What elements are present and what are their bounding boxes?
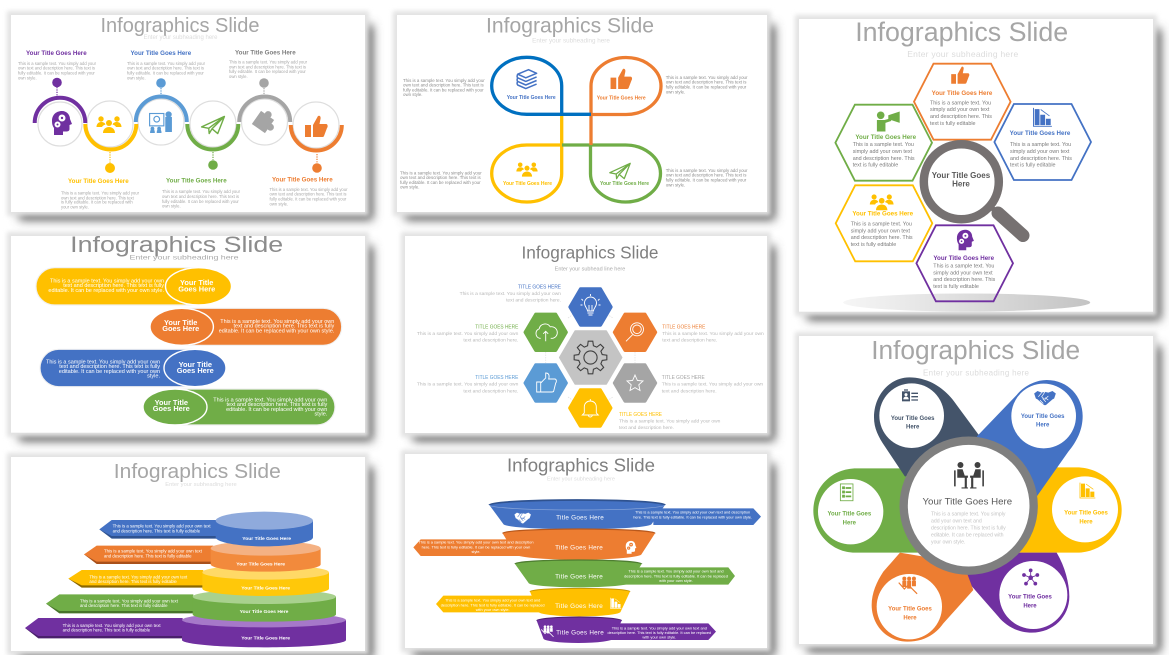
loops diagram <box>492 57 661 202</box>
step descriptions: own text and description here. This text is <box>270 192 346 196</box>
funnel descriptions: with your own style. <box>659 578 693 583</box>
pill: yellow row <box>36 268 232 305</box>
magnifier title: Here <box>952 180 970 188</box>
arrow: purple <box>607 623 716 640</box>
pill descriptions: editable. It can be replaced with your own style. <box>48 288 164 294</box>
subheading: clover slide: Enter your subheading here <box>532 38 610 44</box>
hexagon labels left: text and description here. <box>506 298 561 304</box>
funnel descriptions: with your own style. <box>476 607 510 612</box>
petal titles: Here <box>1079 519 1093 525</box>
arrow descriptions: This is a sample text. You simply add your own text <box>89 574 188 579</box>
arrow descriptions: This is a sample text. You simply add your own text <box>104 549 203 554</box>
funnel diagram <box>413 500 761 643</box>
hexagon descriptions: and description here. This <box>930 114 992 120</box>
pill descriptions: editable. It can be replaced with your own <box>226 407 327 413</box>
petal titles <box>827 414 1108 621</box>
pill descriptions: text and description here. This text is fully <box>63 283 164 289</box>
loop descriptions: own text and description here. This text is <box>666 80 747 85</box>
center ring <box>904 441 1034 571</box>
heading: gear slide: Infographics Slide <box>522 242 658 262</box>
hexagon labels right: text and description here. <box>619 425 674 431</box>
arrow: green <box>623 567 735 585</box>
funnel descriptions: This is a sample text. You simply add your own text and description <box>635 510 750 515</box>
pill descriptions: style. <box>314 411 328 417</box>
hexagon descriptions: simply add your own text <box>1010 149 1070 155</box>
step descriptions: own text and description here. This text is <box>18 66 95 71</box>
funnel descriptions: This is a sample text. You simply add your own text and description <box>418 540 534 545</box>
hexagon titles: Your Title Goes Here <box>852 210 914 218</box>
hexagon labels left: TITLE GOES HERE <box>475 375 519 381</box>
arrow descriptions: and description here. This text is fully editable <box>80 603 168 608</box>
step descriptions: fully editable. It can be replaced with your <box>270 196 347 202</box>
step descriptions: own style. <box>162 204 181 208</box>
hexagon labels left: This is a sample text. You simply add your own <box>460 291 561 297</box>
tier titles: Your Title Goes Here <box>236 562 285 568</box>
hexagon titles: Your Title Goes Here <box>855 134 917 141</box>
panel: magnifier hexagons slide <box>795 15 1161 320</box>
tier: purple <box>537 617 622 643</box>
arrow descriptions: This is a sample text. You simply add your own text <box>80 598 179 603</box>
hexagon descriptions: This is a sample text. You <box>853 142 914 148</box>
loop descriptions: This is a sample text. You simply add your <box>400 170 482 176</box>
cylinder: orange tier <box>211 541 321 572</box>
funnel descriptions: This is a sample text. You simply add your own text and <box>628 569 724 574</box>
loop descriptions: fully editable. It can be replaced with your <box>666 178 747 182</box>
hexagon labels right: This is a sample text. You simply add your own <box>662 331 764 337</box>
hexagon labels right: TITLE GOES HERE <box>662 324 706 330</box>
arrow: orange <box>84 546 213 564</box>
loop titles: Your Title Goes Here <box>600 181 649 187</box>
funnel titles: Title Goes Here <box>555 603 603 610</box>
loop titles: Your Title Goes Here <box>597 96 646 102</box>
icon: thumbs up <box>611 69 632 89</box>
magnifying glass <box>924 144 1023 236</box>
loop descriptions: own style. <box>666 182 685 188</box>
panel: clover loops slide <box>393 11 775 220</box>
icon: puzzle <box>252 107 280 136</box>
step descriptions: your own style. <box>61 205 89 210</box>
heading: cylinders slide: Infographics Slide <box>114 461 281 483</box>
petal titles: Here <box>906 425 920 431</box>
loop descriptions <box>400 75 748 190</box>
step descriptions: own style. <box>270 202 288 206</box>
icon: bars <box>611 598 621 608</box>
arrow descriptions: This is a sample text. You simply add your own text <box>113 524 211 529</box>
petal titles: Your Title Goes <box>891 416 935 422</box>
cylinder stack diagram <box>25 512 346 647</box>
subheading: cylinders slide: Enter your subheading here <box>165 482 237 488</box>
funnel titles: Title Goes Here <box>556 514 604 521</box>
pill titles: Your Title <box>179 360 212 369</box>
loop titles: Your Title Goes Here <box>503 181 552 187</box>
hexagon titles: Your Title Goes Here <box>933 255 995 262</box>
connector dots <box>52 78 322 173</box>
heading: funnel slide: Infographics Slide <box>507 454 655 476</box>
panel: petals slide <box>795 332 1161 652</box>
funnel descriptions: description here. This text is fully editable. It can be replaced <box>441 602 545 607</box>
hexagon descriptions: simply add your own text <box>853 149 913 155</box>
step descriptions: own style. <box>229 74 248 79</box>
tier titles: Your Title Goes Here <box>242 536 291 542</box>
hexagon descriptions: simply add your own text <box>930 107 990 113</box>
step titles: Your Title Goes Here <box>166 178 227 184</box>
hexagon descriptions: text is fully editable <box>933 284 979 290</box>
icon: paper plane <box>202 116 224 134</box>
step descriptions: This is a sample text. You simply add your <box>229 60 308 64</box>
petal titles: Your Title Goes <box>888 607 932 613</box>
hexagon: light blue thumb <box>525 365 566 401</box>
funnel descriptions: This is a sample text. You simply add your own text and <box>445 598 540 603</box>
icon: bar chart <box>1034 108 1052 126</box>
connector lines <box>546 313 635 402</box>
pill: blue row <box>40 349 226 387</box>
arrow: green <box>46 594 193 613</box>
hexagon descriptions: This is a sample text. You <box>933 264 994 270</box>
funnel descriptions: description here. This text is fully editable. It can be replaced <box>607 630 711 635</box>
icon: thumbs up <box>951 67 969 84</box>
center description: This is a sample text. You simply <box>931 511 1006 517</box>
loop titles: Your Title Goes Here <box>507 95 556 101</box>
magnifier title: Your Title Goes <box>932 171 991 180</box>
center description: description here. This text is fully <box>931 525 1006 531</box>
hexagon labels left: This is a sample text. You simply add your own <box>417 382 519 388</box>
arrow descriptions: and description here. This text is fully editable <box>89 579 177 584</box>
tier titles <box>236 536 291 641</box>
hexagon descriptions <box>851 100 1072 290</box>
funnel titles <box>555 514 604 637</box>
hexagon labels left <box>417 284 562 394</box>
hexagon titles <box>852 90 1071 262</box>
funnel descriptions: This is a sample text. You simply add your own text and <box>612 625 707 630</box>
icon: paper plane <box>610 163 630 179</box>
hexagon descriptions: and description here. This <box>851 235 913 241</box>
hexagon descriptions: simply add your own text <box>933 270 993 276</box>
petal titles: Your Title Goes <box>1021 414 1065 420</box>
loop descriptions: own text and description here. This text is <box>666 173 747 178</box>
petal titles: Here <box>1036 423 1050 429</box>
arrow: yellow <box>436 596 547 612</box>
loop descriptions: own text and description here. This text is <box>400 175 482 180</box>
hexagon titles: Your Title Goes Here <box>1010 130 1071 137</box>
funnel titles: Title Goes Here <box>555 574 603 581</box>
tier: orange <box>503 529 655 560</box>
hexagon: orange magnifier <box>614 314 656 350</box>
hexagon descriptions: This is a sample text. You <box>930 100 991 106</box>
petal titles: Here <box>1023 603 1037 609</box>
petal titles: Your Title Goes <box>827 512 872 518</box>
loop descriptions: fully editable. It can be replaced with your <box>403 87 484 92</box>
pill descriptions: text and description here. This text is fully <box>234 324 335 330</box>
hexagon descriptions: text is fully editable <box>1010 163 1056 169</box>
icon: head with gears <box>52 111 72 135</box>
funnel descriptions: description here. This text is fully editable. It can be replaced <box>624 573 728 578</box>
icon: people <box>516 162 538 177</box>
tier: blue <box>489 500 665 529</box>
step descriptions: This is a sample text. You simply add your <box>61 191 140 196</box>
loop descriptions: own style. <box>403 92 423 97</box>
funnel descriptions: with your own style. <box>642 635 676 640</box>
step descriptions: own text and description here. This text <box>61 195 135 200</box>
icon: team chart <box>541 626 554 637</box>
icon: books <box>517 70 537 89</box>
loop descriptions: own style. <box>666 89 685 94</box>
hexagon: green cloud <box>525 314 566 350</box>
hexagon: blue bulb <box>570 289 611 325</box>
icon: people <box>870 194 894 210</box>
center description: your own style. <box>931 539 965 545</box>
pill titles: Your Title <box>155 398 188 407</box>
petal titles: Here <box>843 520 857 526</box>
icon: network <box>1022 569 1039 585</box>
loop descriptions: fully editable. It can be replaced with your <box>400 180 481 185</box>
center description: add your own text and <box>931 518 982 524</box>
center title: Your Title Goes Here <box>922 496 1012 506</box>
arrow descriptions: This is a sample text. You simply add your own text <box>63 623 161 628</box>
arrow: blue <box>99 520 217 539</box>
pill titles: Your Title <box>164 318 197 327</box>
step descriptions: This is a sample text. You simply add your <box>127 61 206 66</box>
hexagon descriptions: text is fully editable <box>930 121 976 127</box>
petal: blue <box>977 380 1083 497</box>
arrow: orange <box>413 539 533 556</box>
step titles: Your Title Goes Here <box>68 178 129 185</box>
loop titles <box>503 95 649 187</box>
icon: people <box>96 116 122 133</box>
pill titles: Your Title <box>180 278 213 287</box>
pill descriptions: This is a sample text. You simply add your own <box>213 398 327 404</box>
hexagon labels right: This is a sample text. You simply add your own <box>619 418 721 424</box>
step descriptions: fully editable. It can be replaced with your <box>162 199 239 204</box>
pill titles <box>153 278 215 413</box>
hexagon labels right: text and description here. <box>662 388 717 394</box>
petal titles: Your Title Goes <box>1064 511 1108 517</box>
hexagon descriptions: and description here. This <box>1010 156 1072 162</box>
pill descriptions: editable. It can be replaced with your own style. <box>219 328 335 334</box>
icon: bars yellow <box>1080 483 1095 498</box>
hexagon: grey star <box>614 365 656 401</box>
pill titles: Goes Here <box>162 324 199 333</box>
funnel titles: Title Goes Here <box>556 630 604 637</box>
center hexagon <box>560 331 622 384</box>
step descriptions: is fully editable. It can be replaced with <box>61 200 133 205</box>
hexagon descriptions: text is fully editable <box>851 242 896 248</box>
arrow: blue <box>653 508 761 525</box>
petal: yellow <box>1017 467 1122 553</box>
step titles <box>26 50 333 185</box>
panel: stacked cylinders slide <box>7 453 373 655</box>
heading: clover slide: Infographics Slide <box>486 14 654 38</box>
subheading: magnifier slide: Enter your subheading here <box>907 49 1018 59</box>
panel: pill rows slide <box>7 232 373 441</box>
petal: green <box>813 468 923 553</box>
hexagon descriptions: simply add your own text <box>851 228 911 234</box>
loop descriptions: fully editable. It can be replaced with your <box>666 84 747 90</box>
funnel titles: Title Goes Here <box>555 545 603 552</box>
step titles: Your Title Goes Here <box>272 176 333 184</box>
funnel descriptions: here. This text is fully editable. It can be replaced with your own style. <box>633 514 752 519</box>
arrow descriptions: and description here. This text is fully editable <box>63 628 151 633</box>
step titles: Your Title Goes Here <box>26 50 87 57</box>
pill descriptions: style. <box>147 374 160 380</box>
hexagon labels right: This is a sample text. You simply add your own <box>662 382 763 388</box>
loop descriptions: This is a sample text. You simply add your <box>666 168 748 173</box>
loop descriptions: own text and description here. This text is <box>403 83 485 88</box>
tier titles: Your Title Goes Here <box>240 609 289 615</box>
subheading: pill slide: Enter your subheading here <box>130 254 239 262</box>
petal: purple <box>963 553 1069 633</box>
petal: navy <box>874 377 980 477</box>
hexagon labels left: TITLE GOES HERE <box>518 284 562 290</box>
panel: funnel slide <box>401 450 775 655</box>
petal titles: Here <box>903 615 917 621</box>
hexagon labels left: TITLE GOES HERE <box>475 324 519 330</box>
loop descriptions: This is a sample text. You simply add your <box>403 78 485 83</box>
petal: orange <box>872 553 973 642</box>
step descriptions: own text and description here. This text is <box>229 64 306 69</box>
step descriptions: This is a sample text. You simply add your <box>162 189 241 194</box>
pill descriptions: text and description here. This text is fully <box>59 364 160 370</box>
loop descriptions: This is a sample text. You simply add your <box>666 75 748 80</box>
icon: gear <box>574 341 607 374</box>
pill descriptions: This is a sample text. You simply add your own <box>50 278 164 284</box>
pill descriptions: This is a sample text. You simply add your own <box>220 319 334 325</box>
tier: green <box>515 560 642 587</box>
panel: gear hexagons slide <box>401 232 775 441</box>
subheading: gear slide: Enter your subhead line here <box>555 266 625 272</box>
arrow: purple <box>25 618 183 638</box>
hexagon descriptions: and description here. This <box>933 277 996 283</box>
pill: orange row <box>150 308 342 345</box>
subheading: timeline slide: Enter your subheading here <box>143 35 218 41</box>
arrow: yellow <box>68 570 203 588</box>
hexagon descriptions: This is a sample text. You <box>1010 142 1071 148</box>
step descriptions: own text and description here. This text is <box>127 66 204 71</box>
hexagon descriptions: and description here. This <box>853 156 915 162</box>
subheading: petals slide: Enter your subheading here <box>923 368 1030 378</box>
step descriptions: own text and description here. This text is <box>162 194 239 199</box>
icon: megaphone person <box>877 112 900 131</box>
cylinder: green tier <box>193 589 336 622</box>
petal titles: Your Title Goes <box>1008 595 1052 601</box>
hexagon descriptions: text is fully editable <box>853 163 898 169</box>
arrow descriptions <box>63 524 211 633</box>
tier titles: Your Title Goes Here <box>241 586 290 592</box>
petal diagram <box>813 377 1122 642</box>
step descriptions: This is a sample text. You simply add your <box>270 187 348 192</box>
step descriptions: fully editable. It can be replaced with your <box>18 70 95 75</box>
center description: editable. It can be replaced with <box>931 533 1004 539</box>
heading: magnifier slide: Infographics Slide <box>855 17 1068 47</box>
icon: team chart <box>899 577 917 594</box>
icon: presenter <box>150 112 171 132</box>
hexagon descriptions: This is a sample text. You <box>851 222 912 228</box>
step descriptions: own style. <box>127 76 146 81</box>
arrow descriptions: and description here. This text is fully editable <box>113 529 201 534</box>
step descriptions: own style. <box>18 76 37 81</box>
heading: pill slide: Infographics Slide <box>70 232 283 257</box>
pill descriptions: text and description here. This text is fully <box>227 402 328 408</box>
step titles: Your Title Goes Here <box>235 50 296 56</box>
icon: head with gears <box>626 541 636 554</box>
pill titles: Goes Here <box>177 366 214 375</box>
funnel descriptions: here. This text is fully editable. It can be replaced with your own <box>422 544 530 549</box>
hexagon labels right: TITLE GOES HERE <box>619 412 663 418</box>
hexagon: yellow bell <box>570 390 611 426</box>
cylinder: blue tier <box>216 512 313 546</box>
pill titles: Goes Here <box>153 404 190 413</box>
step descriptions: This is a sample text. You simply add your <box>18 61 97 66</box>
chain of circles <box>35 96 342 150</box>
icon: handshake <box>1034 391 1056 405</box>
icon: thumbs up <box>305 116 328 137</box>
cylinder: yellow tier <box>202 565 329 596</box>
pill titles: Goes Here <box>178 284 215 293</box>
heading: petals slide: Infographics Slide <box>871 335 1080 365</box>
hexagon labels left: text and description here. <box>463 338 518 344</box>
hexagon outlines <box>835 64 1091 301</box>
loop descriptions: own style. <box>400 184 420 190</box>
heading: timeline slide: Infographics Slide <box>100 15 260 37</box>
pill descriptions: editable. It can be replaced with your own <box>59 369 160 375</box>
funnel descriptions <box>418 510 752 640</box>
pill descriptions: This is a sample text. You simply add your own <box>46 360 160 366</box>
step titles: Your Title Goes Here <box>130 50 192 57</box>
hexagon labels left: text and description here. <box>463 388 518 394</box>
pedestal ellipse <box>843 294 1090 312</box>
step descriptions: fully editable. It can be replaced with your <box>127 70 204 75</box>
subheading: funnel slide: Enter your subheading here <box>547 476 615 482</box>
icon: id card <box>902 389 918 401</box>
funnel descriptions: style. <box>471 549 481 554</box>
pill descriptions <box>46 278 335 417</box>
icon: handshake <box>514 513 531 523</box>
tier titles: Your Title Goes Here <box>241 635 290 641</box>
pill: green row <box>143 389 335 425</box>
hexagon labels left: This is a sample text. You simply add your own <box>417 331 519 337</box>
icon: head with gears <box>957 230 974 250</box>
tier: yellow <box>530 588 630 616</box>
panel: timeline slide <box>7 11 373 220</box>
cylinder: purple tier <box>182 613 346 647</box>
hexagon labels right: TITLE GOES HERE <box>662 375 705 381</box>
hexagon titles: Your Title Goes Here <box>932 90 993 97</box>
hexagon labels right <box>619 324 764 431</box>
step descriptions: fully editable. It can be replaced with your <box>229 69 306 74</box>
icon: checklist <box>840 484 853 501</box>
icon: meeting <box>954 462 984 488</box>
hexagon labels right: text and description here. <box>662 338 717 344</box>
step descriptions <box>18 60 348 210</box>
arrow descriptions: and description here. This text is fully editable <box>104 553 192 558</box>
